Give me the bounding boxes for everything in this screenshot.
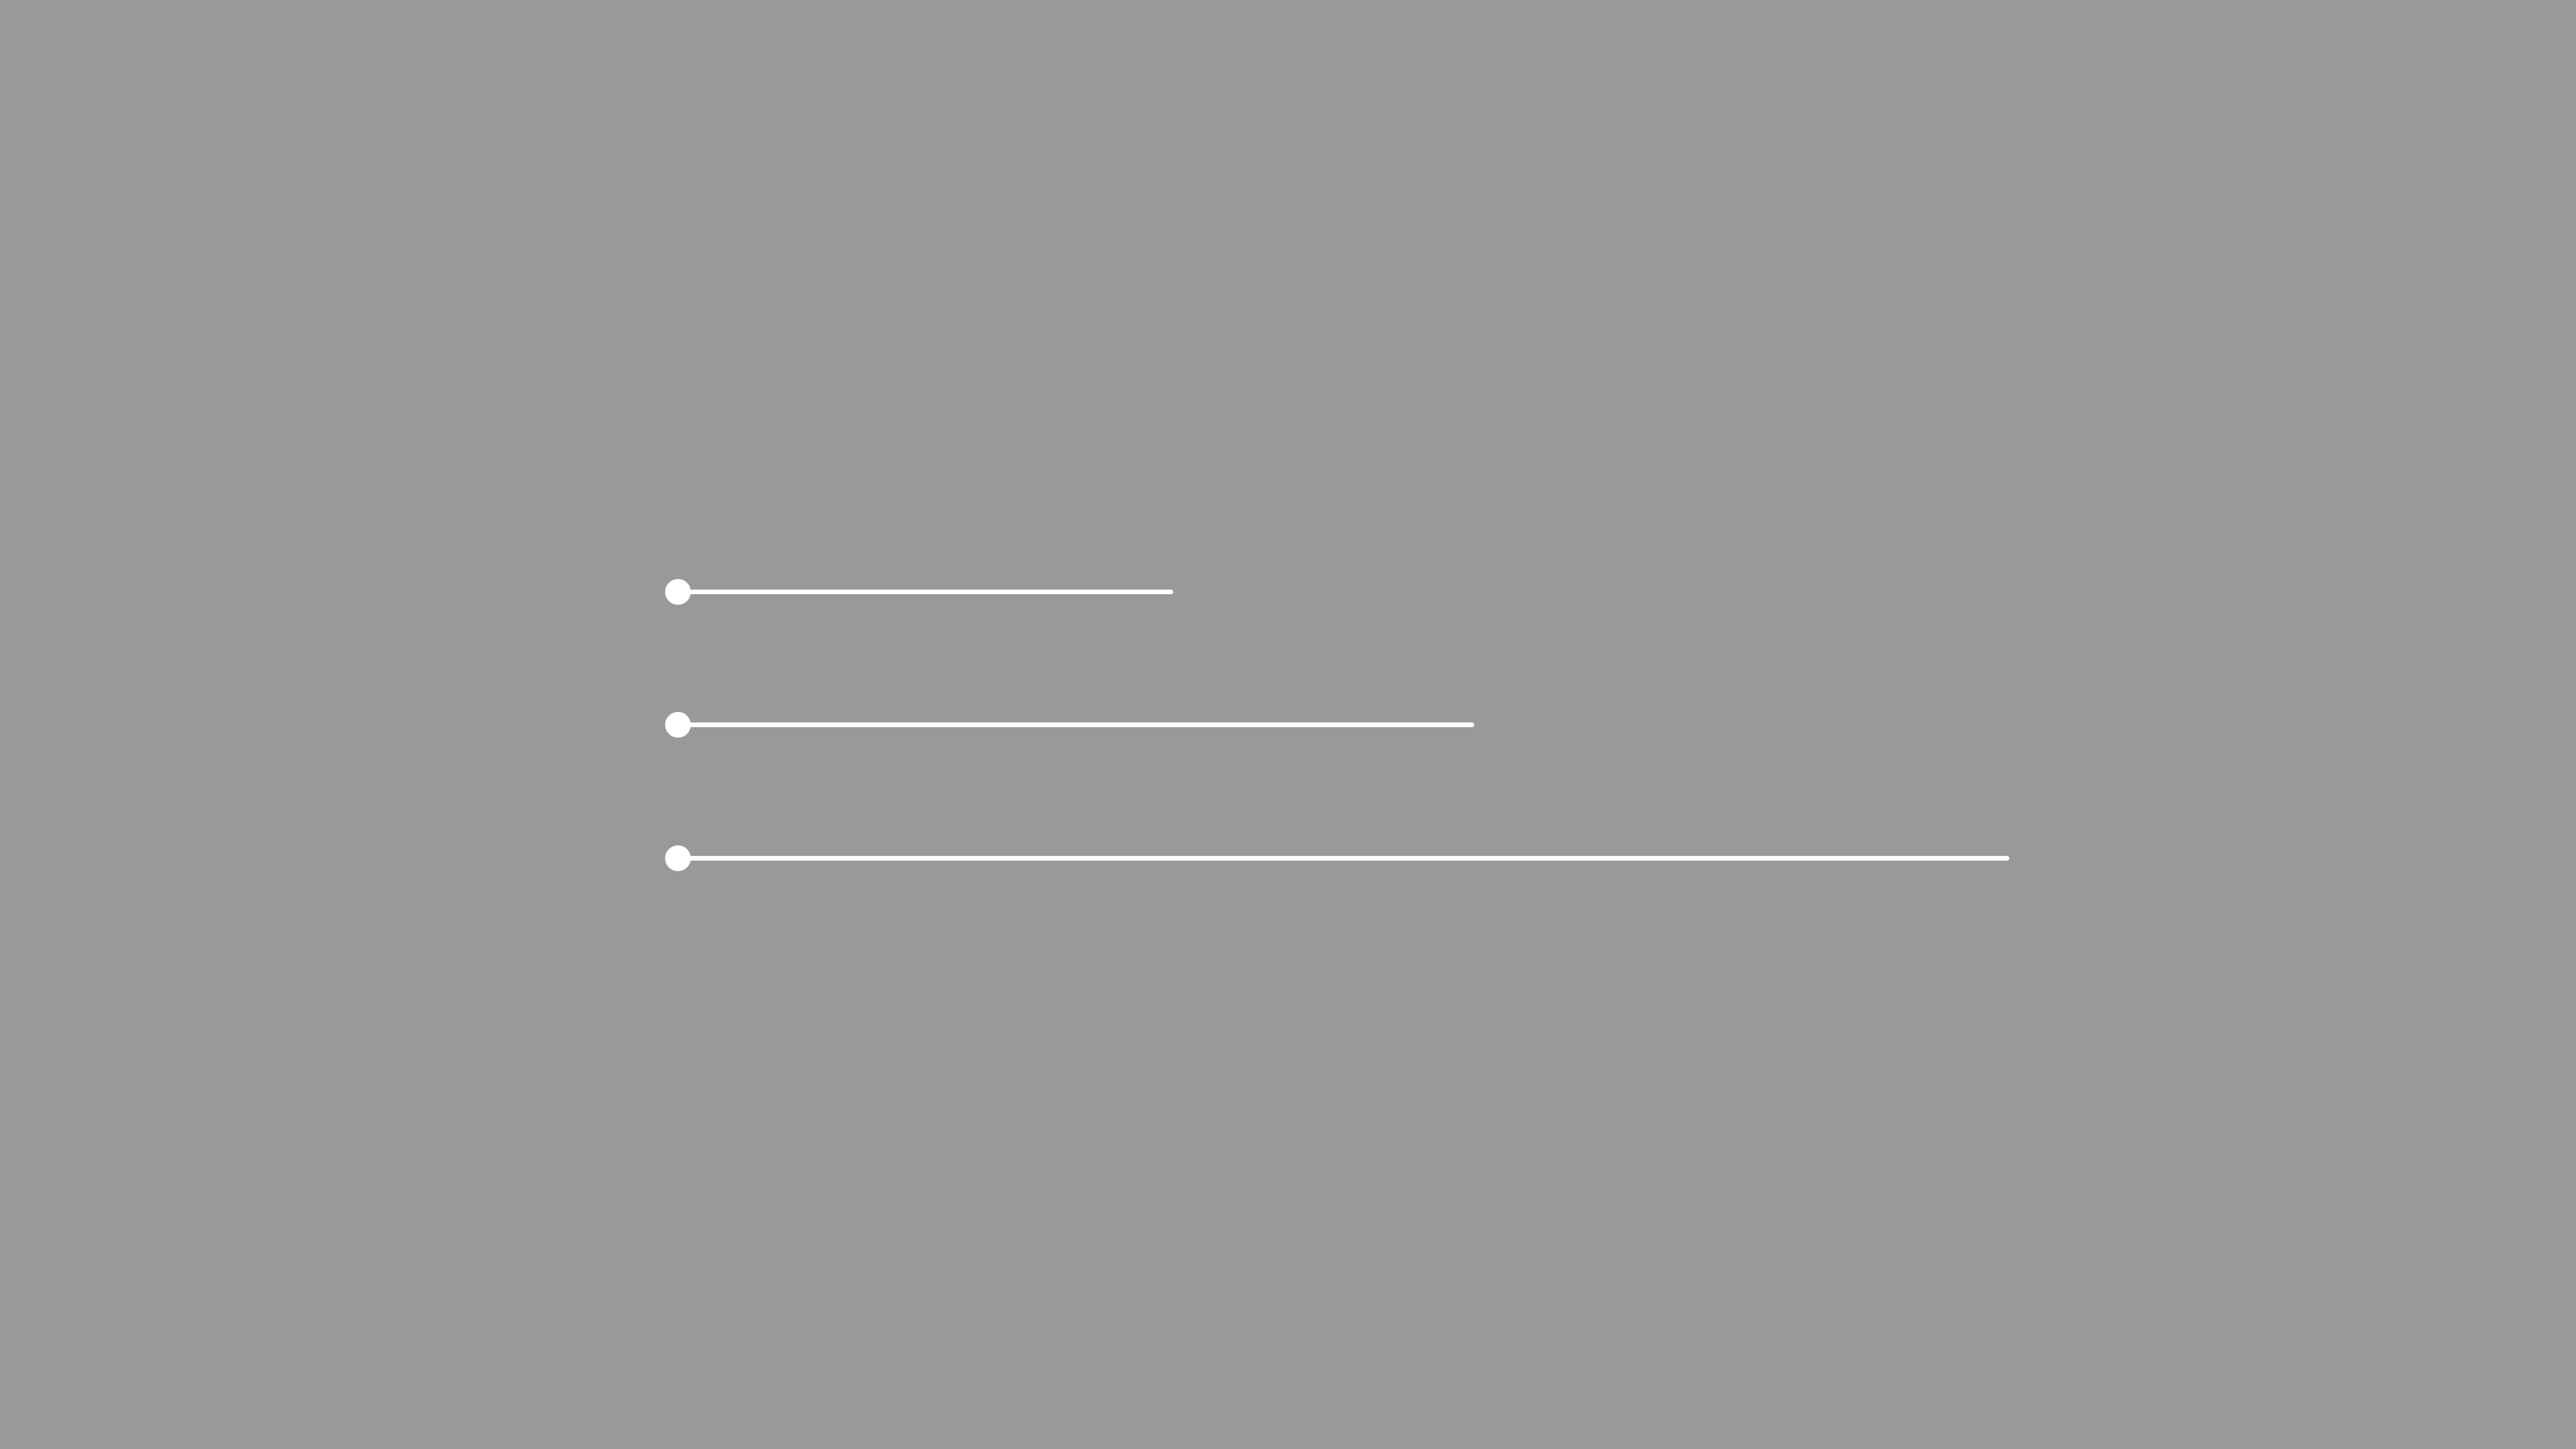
dot marker 1 <box>665 579 691 605</box>
bar 1: short line with dot <box>665 579 1173 605</box>
bar 2: medium line with dot <box>665 712 1474 738</box>
dot marker 2 <box>665 712 691 738</box>
line 2 <box>678 722 1474 727</box>
bar 3: long line with dot <box>665 845 2009 871</box>
dot marker 3 <box>665 845 691 871</box>
line 1 <box>678 590 1173 594</box>
line 3 <box>678 856 2009 861</box>
